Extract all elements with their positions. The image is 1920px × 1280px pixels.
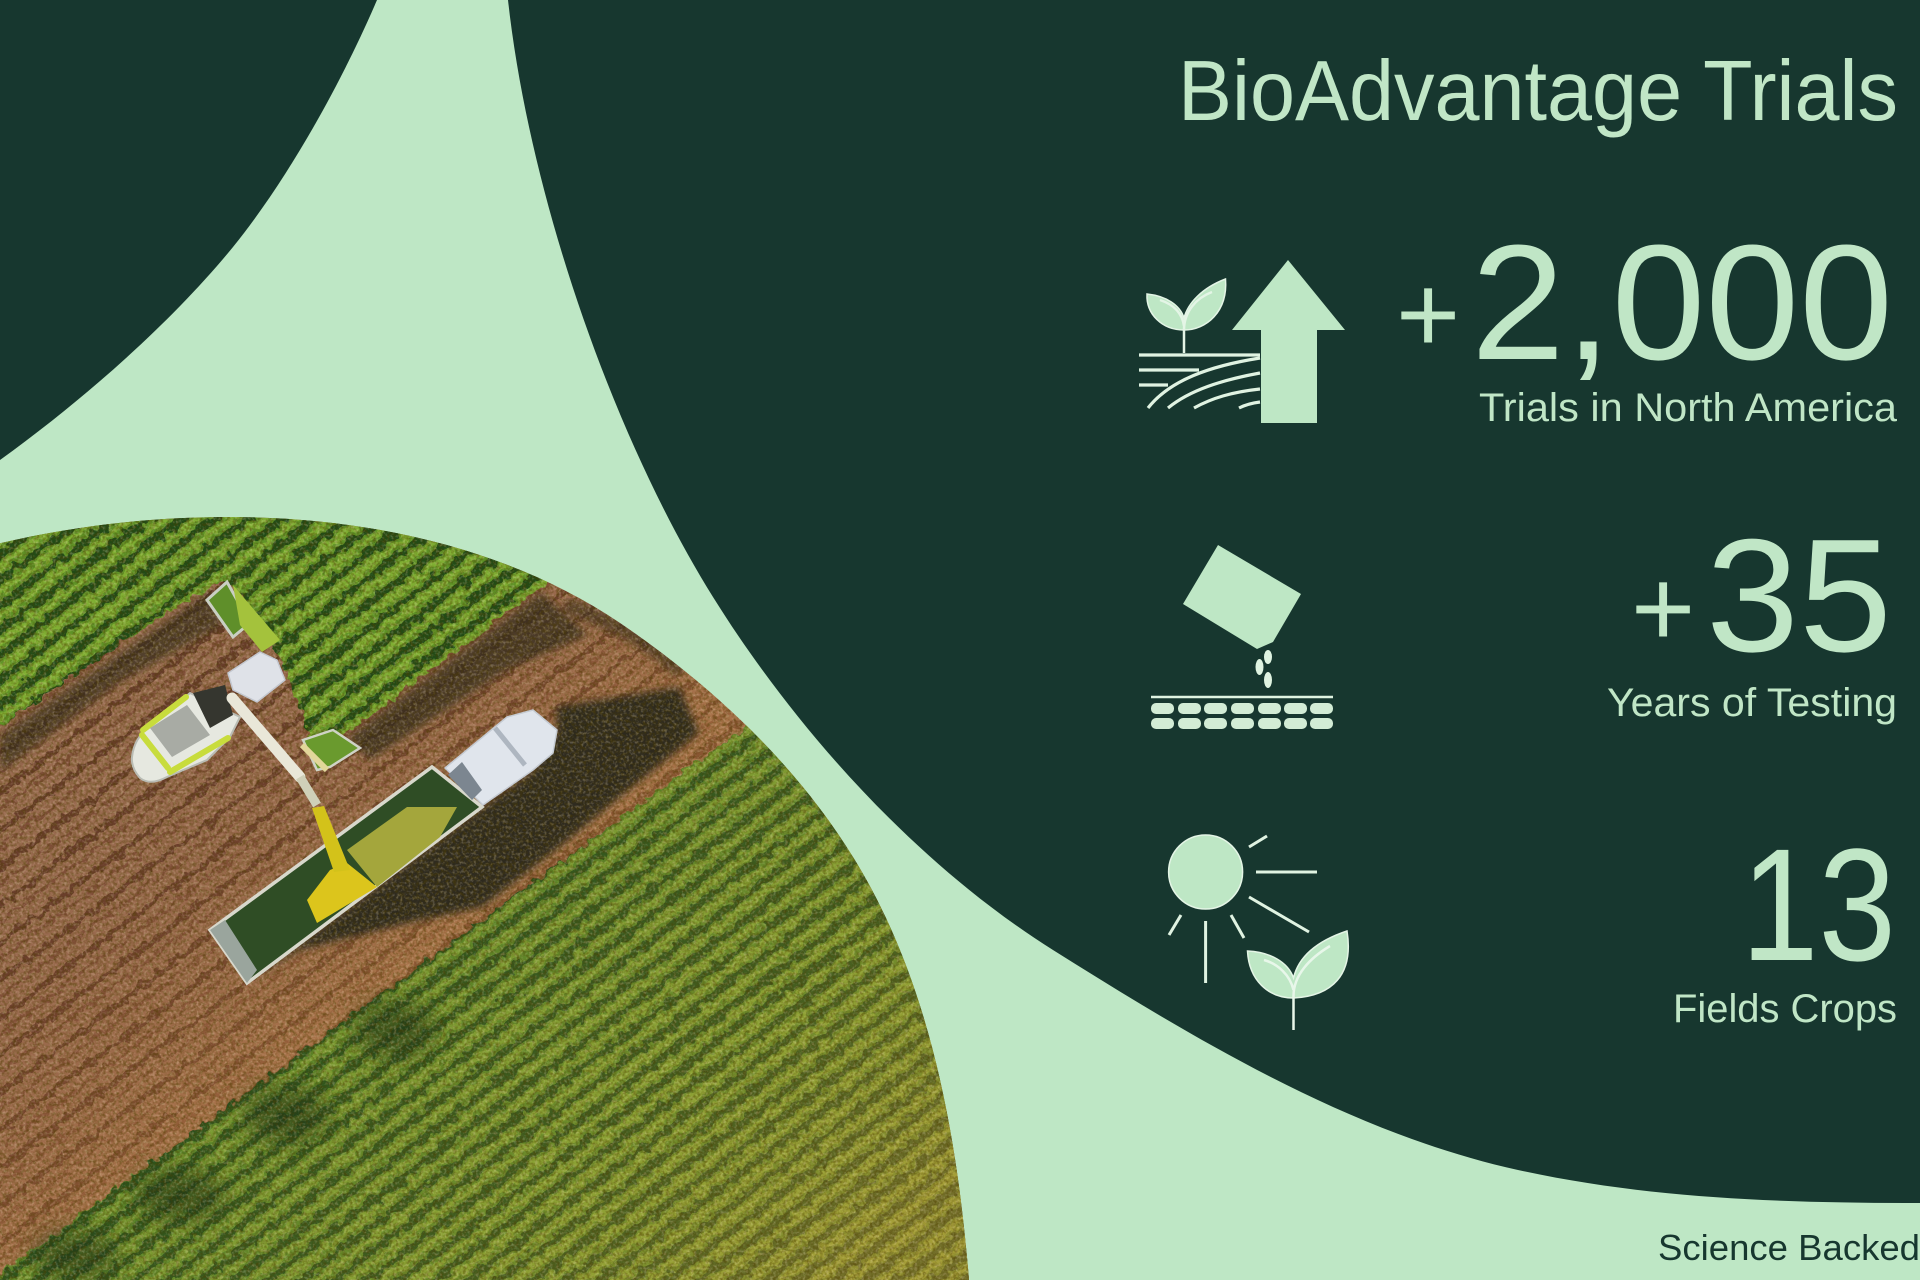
photo: harvester cab [228, 652, 285, 702]
stat: crops [1169, 815, 1897, 1031]
photo: pale crop strip [302, 745, 327, 770]
photo: tree shadow at top right [565, 605, 682, 672]
arrow [1232, 260, 1345, 423]
icon: sun shining on plant [1169, 835, 1348, 1030]
photo: top crop area [0, 517, 548, 738]
soil line [1151, 696, 1333, 698]
photo: harvester body [132, 693, 240, 782]
photo: harvester engine bay [193, 685, 233, 728]
title: BioAdvantage Trials [1178, 44, 1898, 139]
number: 2,000: 2,000 [1471, 211, 1893, 394]
seedling [1147, 279, 1226, 353]
label: Fields Crops [1673, 987, 1897, 1031]
photo: truck roof line [495, 728, 525, 765]
photo: soil warm tint [0, 592, 844, 1275]
photo: tree shadows in bottom crop [33, 1002, 435, 1279]
number: 13: 13 [1741, 815, 1896, 994]
photo: soil strip [0, 500, 1000, 1280]
stat: years [1151, 506, 1897, 729]
photo: silage load [347, 807, 457, 887]
photo: harvester header lower [303, 730, 360, 770]
photo: light speckle texture [0, 500, 1000, 1280]
label: Years of Testing [1607, 681, 1897, 725]
sun rays [1169, 836, 1317, 983]
field lines [1139, 355, 1260, 408]
photo: harvester spout [232, 698, 300, 777]
plus sign: + [1396, 253, 1460, 376]
photo: bottom crop colour tint [0, 716, 1000, 1280]
photo: bottom crop area [0, 712, 1020, 1280]
plus sign: + [1631, 547, 1695, 670]
photo: bright cut crop [233, 585, 280, 652]
photo: trailer [210, 767, 482, 983]
photo: shadow beside top crop [0, 590, 222, 772]
photo: silage stream [312, 806, 350, 872]
photo: spout tip [300, 777, 317, 805]
label: Trials in North America [1479, 386, 1898, 430]
plant [1248, 931, 1348, 1030]
photo: truck cab window [448, 762, 482, 800]
soil pills [1151, 703, 1333, 729]
photo: harvester deck [150, 705, 210, 757]
bag [1183, 545, 1301, 649]
photo: dark grain texture [0, 500, 1000, 1280]
stat: trials [1139, 211, 1898, 430]
seeds [1256, 650, 1272, 688]
panel: top-left dark corner shape [0, 0, 377, 460]
icon: plant, field and up arrow [1139, 260, 1345, 423]
panel: right dark stats shape [508, 0, 1920, 1203]
photo: harvester yellow band [142, 697, 228, 772]
photo: trailer tail gate [210, 920, 257, 983]
number: 35: 35 [1706, 506, 1892, 686]
photo: truck [445, 710, 557, 805]
photo: harvester header upper [207, 582, 250, 637]
photo: aerial view of forage harvest in a corn field [0, 517, 969, 1280]
icon: bag pouring seeds on soil [1151, 545, 1333, 729]
sun [1169, 835, 1243, 909]
photo: silage pile [307, 863, 377, 923]
photo: shadow along centre crop edge [347, 592, 588, 760]
photo: shadow of truck and trailer [247, 687, 699, 983]
footer tagline: Science Backed [1658, 1227, 1920, 1268]
